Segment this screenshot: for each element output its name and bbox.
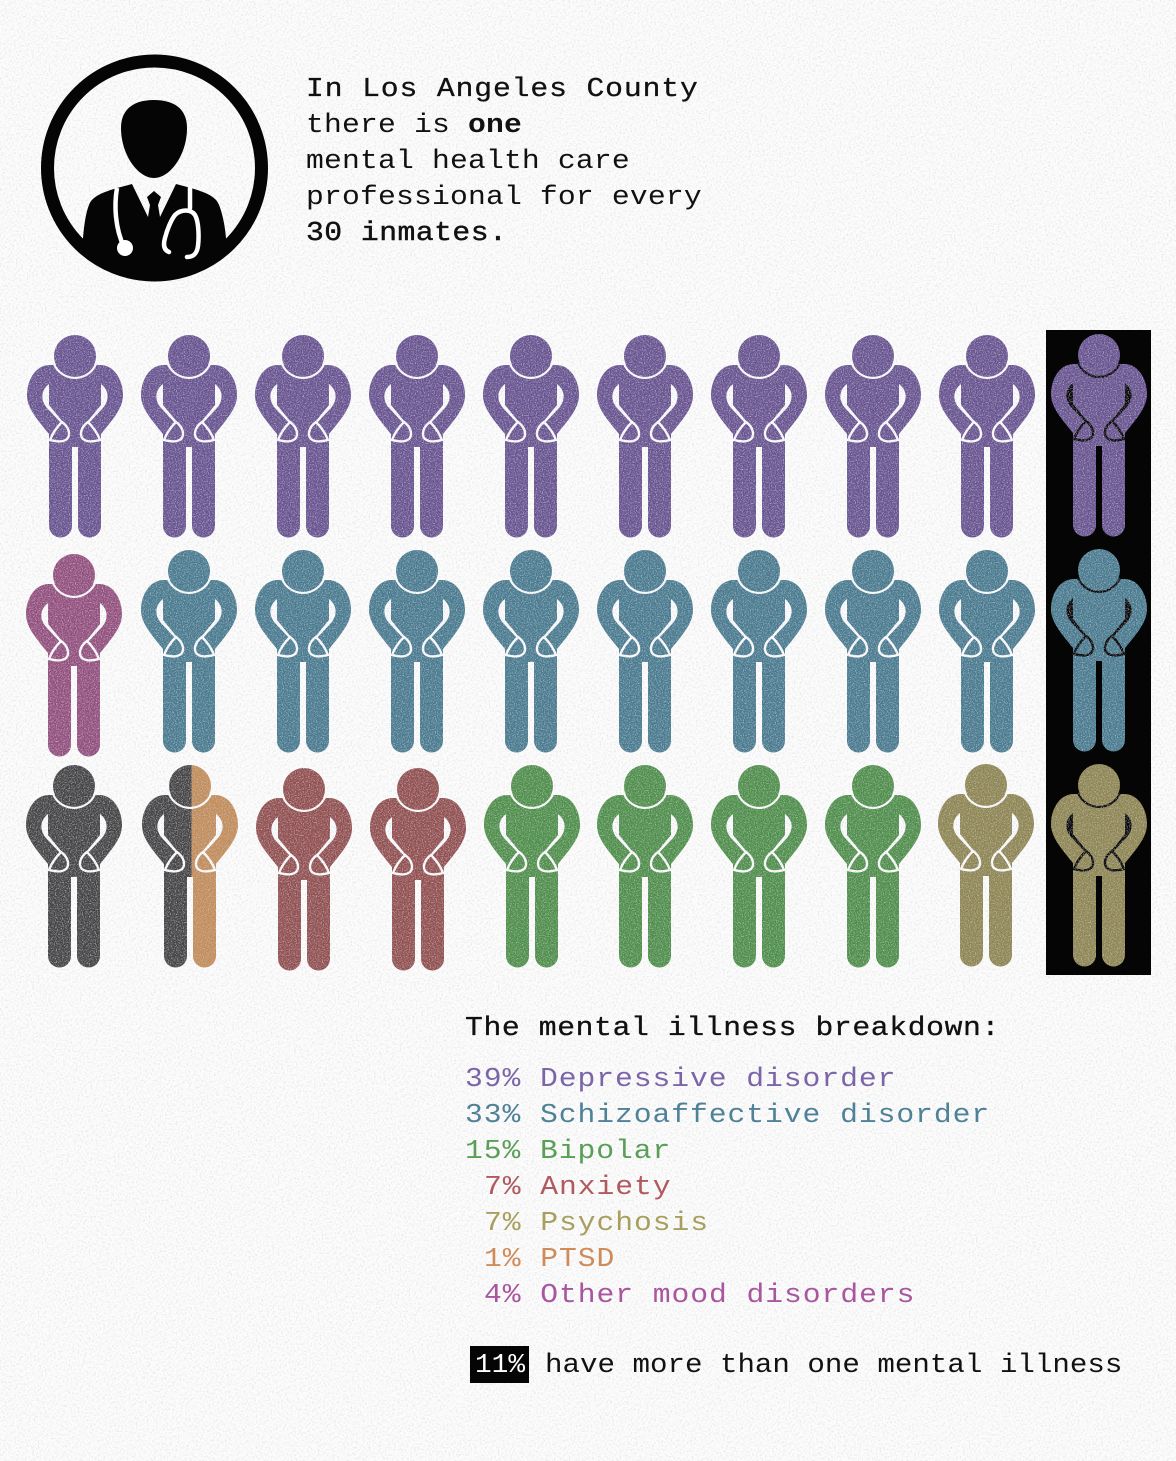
- figure 10, highlighted: [1051, 334, 1147, 536]
- figure 1: [27, 335, 123, 538]
- figure: psychosis: [938, 764, 1034, 966]
- legend item: other mood disorders: 4% Other mood disorders: [484, 1279, 915, 1311]
- legend item: psychosis: 7% Psychosis: [484, 1207, 709, 1239]
- figure: grey: [26, 765, 122, 968]
- figure 5: [483, 335, 579, 538]
- figure 2: [141, 550, 237, 752]
- panel: black column highlight: [1046, 330, 1151, 975]
- figure: bipolar 1: [484, 765, 580, 968]
- legend item: anxiety: 7% Anxiety: [484, 1171, 672, 1203]
- figure: bipolar 2: [597, 765, 693, 968]
- figure 6: [597, 335, 693, 538]
- legend: illness breakdown: [465, 1063, 990, 1311]
- legend item: PTSD: 1% PTSD: [484, 1243, 615, 1275]
- figure 4: [369, 335, 465, 538]
- callout: 11 percent: 11%: [475, 1350, 526, 1381]
- figure 5: [483, 550, 579, 752]
- figure 10, highlighted: [1051, 549, 1147, 752]
- row 2: other mood disorder and schizoaffective figures: [26, 549, 1147, 756]
- figure 7: [711, 550, 807, 752]
- intro text: [306, 73, 702, 249]
- row 3: mixed illness figures: [26, 764, 1147, 970]
- figure 2: [141, 335, 237, 538]
- figure: half grey, half orange: [142, 765, 238, 968]
- figure 9: [939, 335, 1035, 538]
- figure: psychosis, highlighted: [1051, 764, 1147, 966]
- figure 3: [255, 335, 351, 538]
- legend item: schizoaffective: 33% Schizoaffective disorder: [465, 1099, 990, 1131]
- figure 4: [369, 550, 465, 752]
- figure: other mood disorder: [26, 554, 122, 756]
- figure: anxiety 1: [256, 768, 352, 970]
- legend item: bipolar: 15% Bipolar: [465, 1135, 671, 1167]
- figure 9: [939, 550, 1035, 752]
- intro text: In Los Angeles County: [306, 73, 699, 105]
- figure: anxiety 2: [370, 768, 466, 970]
- heading: breakdown: The mental illness breakdown:: [465, 1012, 1000, 1044]
- row 1: depressive disorder figures: [27, 334, 1147, 538]
- icon: doctor with stethoscope: [48, 61, 262, 290]
- figure 7: [711, 335, 807, 538]
- figure: bipolar 4: [825, 765, 921, 968]
- intro text: professional for every: [306, 181, 702, 213]
- figure 8: [825, 335, 921, 538]
- intro text: 30 inmates.: [306, 217, 507, 249]
- intro text: mental health care: [306, 145, 630, 177]
- figure 8: [825, 550, 921, 752]
- intro text: there is one: [306, 109, 522, 141]
- callout: 11 percent: have more than one mental illness: [545, 1351, 1122, 1381]
- legend item: depressive: 39% Depressive disorder: [465, 1063, 896, 1095]
- figure: bipolar 3: [711, 765, 807, 968]
- figure 6: [597, 550, 693, 752]
- figure 3: [255, 550, 351, 752]
